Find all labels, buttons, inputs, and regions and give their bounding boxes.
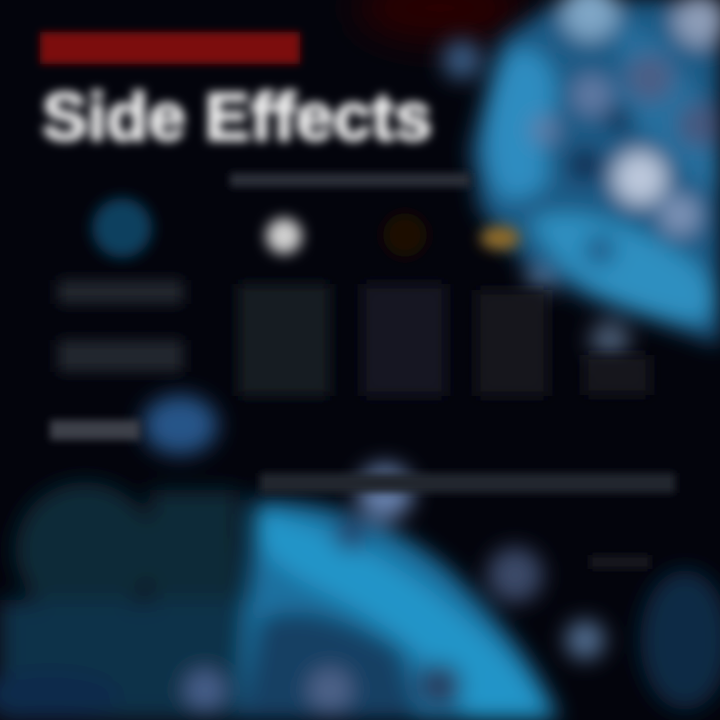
icon: blue circle (92, 198, 152, 258)
subtitle line (230, 173, 470, 187)
column 1 text (58, 280, 183, 372)
column 5 text (584, 355, 650, 395)
column 2 text (238, 284, 330, 396)
orange highlight (480, 226, 520, 250)
molecule cluster: top right (442, 0, 720, 360)
section label (50, 420, 140, 440)
small text: bottom right (590, 555, 650, 569)
icon: brown circle (383, 213, 427, 257)
dark red glow at top (355, 0, 525, 42)
column 4 text (476, 290, 548, 396)
title: Side Effects (42, 79, 432, 155)
column 3 text (362, 284, 446, 396)
red banner (40, 32, 300, 64)
long text line (260, 473, 675, 493)
icon: white circle (266, 218, 302, 254)
molecule cluster: bottom (0, 395, 720, 720)
